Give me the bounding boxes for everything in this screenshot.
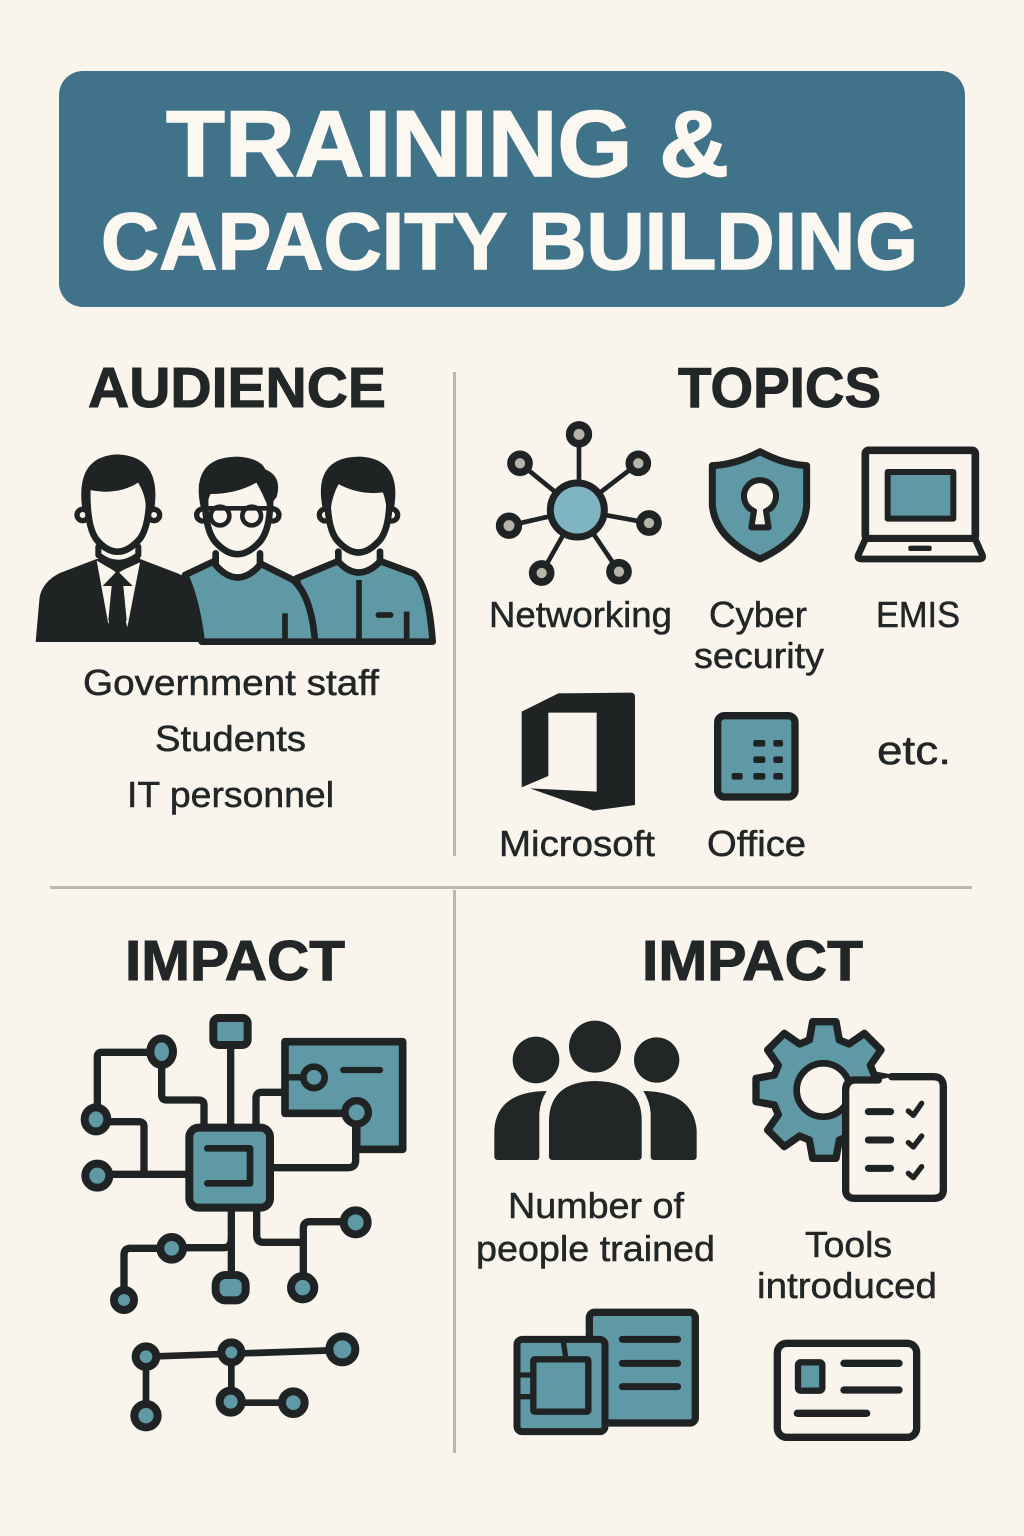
label: number of people trained: Number of	[508, 1185, 685, 1226]
icon: id card	[777, 1343, 917, 1437]
icon: people group	[494, 1021, 697, 1160]
panel: topics	[489, 356, 983, 864]
icon: gear and checklist	[756, 1022, 943, 1198]
diagram: connected circuit network	[85, 1018, 403, 1427]
label: number of people trained: people trained	[476, 1228, 715, 1269]
icon: laptop	[858, 450, 983, 559]
icon: microsoft office logo	[522, 693, 635, 811]
heading: impact: IMPACT	[125, 929, 345, 993]
label: cyber security: security	[694, 635, 824, 676]
panel: audience	[36, 356, 433, 815]
label: etc: etc.	[877, 729, 951, 773]
label: cyber security	[694, 594, 824, 676]
icon: shield	[712, 452, 807, 559]
label: networking: Networking	[489, 594, 672, 635]
icon: three people	[36, 455, 433, 642]
heading: impact: IMPACT	[642, 929, 863, 993]
label: microsoft: Microsoft	[499, 823, 655, 864]
label: tools introduced: introduced	[757, 1265, 937, 1306]
label: EMIS: EMIS	[876, 594, 960, 635]
title banner: TRAINING &	[166, 91, 729, 196]
list: audience groups: Students	[155, 718, 306, 759]
icon: office calculator tile	[718, 716, 795, 797]
title banner	[59, 71, 965, 307]
title banner: CAPACITY BUILDING	[101, 197, 918, 287]
panel: impact left	[85, 929, 403, 1427]
heading: audience: AUDIENCE	[88, 356, 386, 420]
label: cyber security: Cyber	[709, 594, 807, 635]
list: audience groups: Government staff	[83, 662, 380, 703]
label: office: Office	[707, 823, 806, 864]
icon: overlapping documents	[517, 1312, 695, 1432]
label: tools introduced	[757, 1224, 937, 1306]
label: tools introduced: Tools	[805, 1224, 892, 1265]
heading: topics: TOPICS	[678, 356, 881, 420]
label: number of people trained	[476, 1185, 715, 1269]
list: audience groups	[83, 662, 380, 815]
icon: networking hub	[500, 425, 658, 582]
list: audience groups: IT personnel	[127, 774, 334, 815]
panel: impact right	[476, 929, 943, 1437]
